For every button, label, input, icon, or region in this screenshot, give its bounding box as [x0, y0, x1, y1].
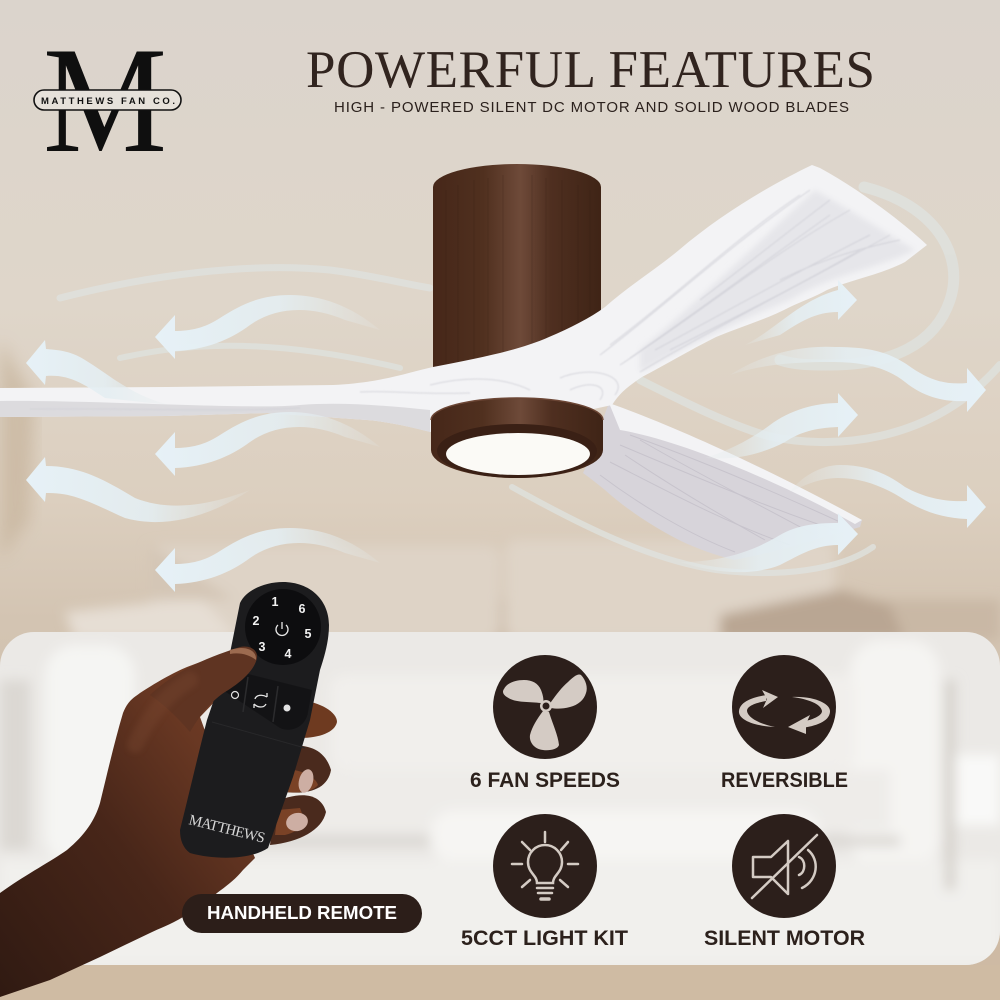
- logo: Matthews Fan Co.: MATTHEWS FAN CO.: [41, 96, 175, 107]
- blade shading: [0, 190, 915, 432]
- icon: light bulb: [512, 832, 578, 899]
- remote buttons: 2: [253, 614, 260, 628]
- icon: power: [276, 622, 288, 635]
- fan light: [446, 433, 590, 475]
- remote buttons: 3: [259, 640, 266, 654]
- feature: 6 fan speeds: [470, 655, 620, 792]
- icon: fan: [503, 674, 587, 750]
- remote body: [180, 582, 329, 858]
- remote brand: MATTHEWS: [187, 812, 267, 847]
- remote buttons: [253, 595, 312, 661]
- icon: reverse: [254, 693, 267, 708]
- hand: fingers behind remote: [270, 700, 337, 845]
- faint airflow swirls behind fan: [60, 187, 1000, 573]
- fan motor housing: [433, 164, 601, 380]
- fan blade: front right: [583, 403, 862, 560]
- remote buttons: 5: [305, 627, 312, 641]
- white translucent panel: [0, 632, 1000, 965]
- hand: thumb over remote: [135, 647, 257, 745]
- fan blades: left and back right: [0, 165, 927, 432]
- label: SILENT MOTOR: [704, 927, 865, 950]
- label: REVERSIBLE: [721, 769, 848, 792]
- feature: reversible: [721, 655, 848, 792]
- remote buttons: 4: [285, 647, 292, 661]
- background: sofa and cushions: [65, 540, 1000, 640]
- label pill: handheld remote: HANDHELD REMOTE: [207, 903, 397, 923]
- label: 5CCT LIGHT KIT: [461, 927, 628, 950]
- blade wood grain: [30, 190, 900, 410]
- feature: 5CCT light kit: [461, 814, 628, 950]
- icon: muted speaker: [752, 835, 817, 898]
- hand holding remote: [0, 582, 337, 997]
- fan light housing: [431, 398, 603, 478]
- icon: rotation arrows: [739, 690, 830, 734]
- label pill: handheld remote: [182, 894, 422, 933]
- subtitle: HIGH - POWERED SILENT DC MOTOR AND SOLID WOOD BLADES: [334, 99, 849, 116]
- remote buttons: 1: [272, 595, 279, 609]
- remote buttons: 6: [299, 602, 306, 616]
- logo: Matthews Fan Co.: M: [43, 16, 167, 184]
- ceiling fan: [0, 164, 927, 560]
- hand: palm and arm: [0, 647, 257, 997]
- airflow arrows right: [680, 280, 986, 572]
- label: 6 FAN SPEEDS: [470, 769, 620, 792]
- airflow arrows left: [26, 295, 380, 592]
- feature: silent motor: [704, 814, 865, 950]
- title: POWERFUL FEATURES: [306, 41, 875, 99]
